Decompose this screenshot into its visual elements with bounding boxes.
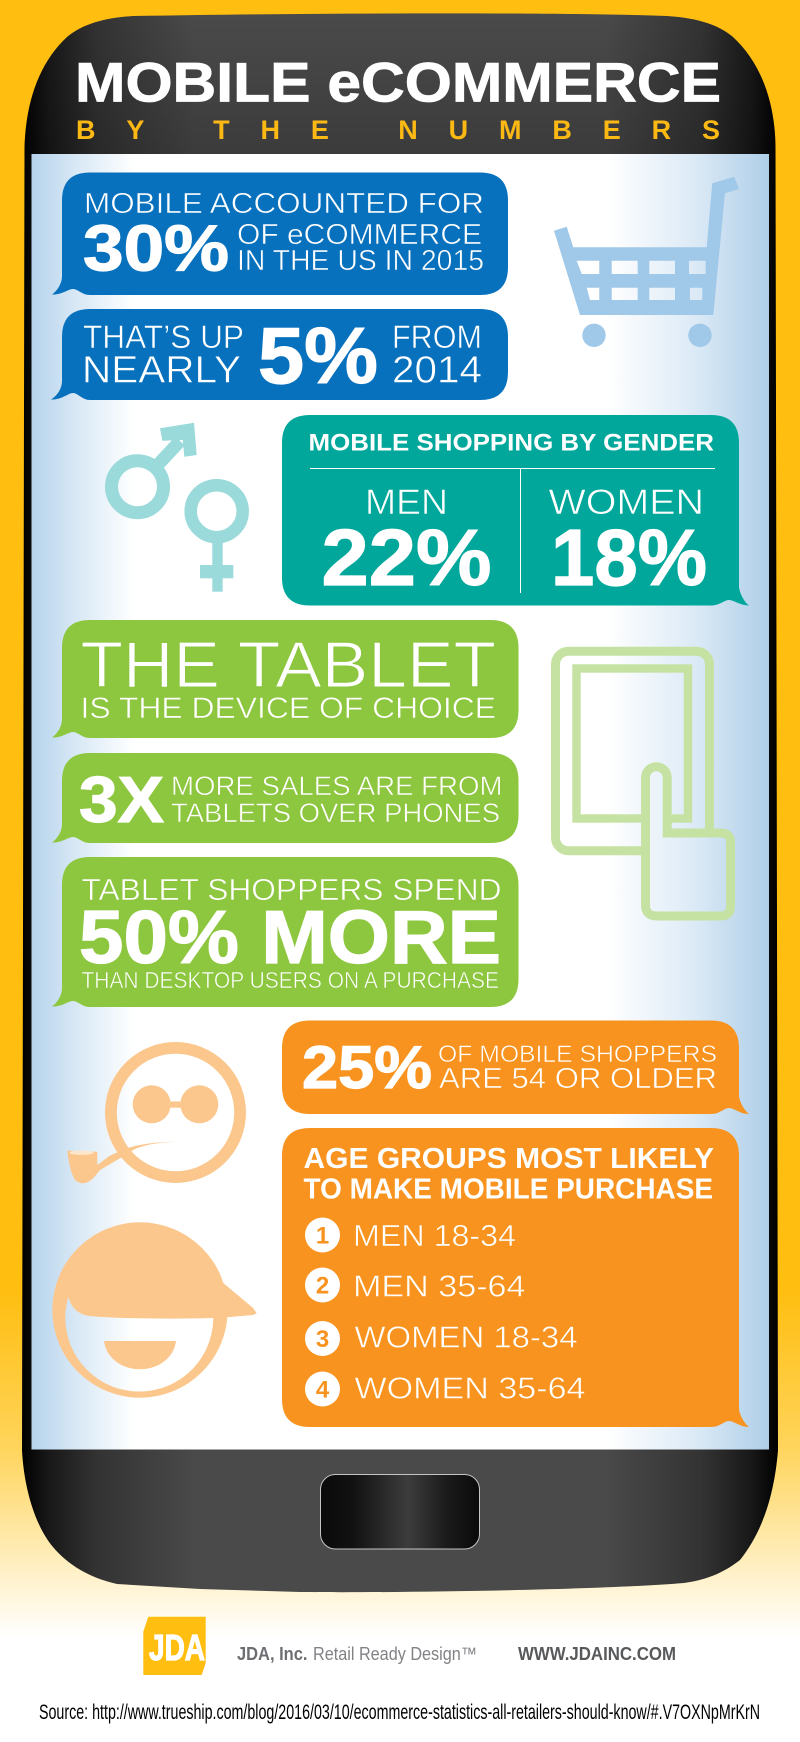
panel: three times more sales (52, 753, 518, 843)
company tagline: JDA, Inc. (237, 1644, 308, 1664)
panel: mobile share bubble: OF eCOMMERCE (237, 219, 482, 251)
panel: mobile shopping by gender: 18% (551, 513, 707, 602)
list item 1: MEN 18-34 (353, 1218, 516, 1253)
list item 4: WOMEN 35-64 (354, 1370, 586, 1406)
icon: shopping cart (554, 177, 739, 347)
logo: JDA: JDA (149, 1627, 205, 1668)
phone screen (32, 154, 769, 1450)
panel: tablet shoppers spend more (52, 857, 518, 1007)
panel: year on year bubble: THAT’S UP (83, 319, 244, 355)
company tagline: Retail Ready Design™ (313, 1644, 477, 1664)
panel: age groups list: AGE GROUPS MOST LIKELY (304, 1143, 714, 1175)
panel: mobile shopping by gender (282, 415, 749, 606)
subtitle: BY THE NUMBERS (76, 115, 720, 145)
icon: gender symbols (112, 423, 243, 592)
list item 3: 3 (316, 1326, 329, 1353)
panel: shoppers over 54 (282, 1020, 749, 1114)
panel: mobile shopping by gender: 22% (322, 513, 492, 602)
panel: tablet device of choice: IS THE DEVICE OF CHOICE (80, 692, 496, 725)
panel: mobile share bubble: 30% (83, 212, 229, 284)
panel: tablet device of choice: THE TABLET (80, 628, 496, 701)
panel: mobile share bubble (52, 172, 508, 295)
panel: year on year bubble: NEARLY (82, 350, 241, 392)
panel: three times more sales: MORE SALES ARE FROM (171, 771, 502, 801)
panel: tablet shoppers spend more: TABLET SHOPPERS SPEND (82, 872, 502, 907)
list item 2: 2 (316, 1272, 329, 1300)
panel: mobile share bubble: IN THE US IN 2015 (237, 245, 484, 277)
icon: younger face with cap (52, 1222, 257, 1398)
panel: shoppers over 54: OF MOBILE SHOPPERS (438, 1041, 717, 1068)
list item 3: WOMEN 18-34 (354, 1320, 578, 1354)
panel: year on year bubble: 5% (258, 311, 378, 400)
panel: three times more sales: 3X (79, 763, 164, 836)
website: WWW.JDAINC.COM (518, 1644, 676, 1664)
list item 4: 4 (316, 1376, 330, 1404)
panel: mobile shopping by gender: MOBILE SHOPPING BY GENDER (308, 430, 714, 456)
company tagline (237, 1644, 477, 1664)
title: MOBILE eCOMMERCE (75, 50, 721, 114)
panel: mobile shopping by gender: WOMEN (548, 483, 704, 522)
panel: tablet device of choice (52, 620, 518, 738)
list item 2: MEN 35-64 (353, 1268, 526, 1304)
panel: tablet shoppers spend more: 50% MORE (79, 895, 501, 979)
panel: mobile shopping by gender: MEN (365, 483, 448, 522)
panel: shoppers over 54: ARE 54 OR OLDER (439, 1063, 717, 1095)
logo: JDA (143, 1617, 206, 1675)
panel: shoppers over 54: 25% (302, 1034, 432, 1101)
home button (320, 1474, 480, 1549)
icon: tablet with pointing hand (556, 651, 730, 916)
panel: age groups list: TO MAKE MOBILE PURCHASE (304, 1174, 713, 1206)
panel: mobile share bubble: MOBILE ACCOUNTED FOR (84, 188, 484, 220)
panel: age groups list (282, 1128, 749, 1427)
panel: year on year bubble: 2014 (392, 350, 482, 392)
icon: older face with glasses and pipe (67, 1048, 240, 1183)
panel: tablet shoppers spend more: THAN DESKTOP USERS ON A PURCHASE (82, 967, 499, 993)
list item 1: 1 (316, 1222, 329, 1250)
panel: year on year bubble (51, 309, 508, 400)
panel: year on year bubble: FROM (392, 319, 482, 355)
panel: three times more sales: TABLETS OVER PHONES (171, 798, 500, 828)
list item 2 (305, 1268, 526, 1304)
